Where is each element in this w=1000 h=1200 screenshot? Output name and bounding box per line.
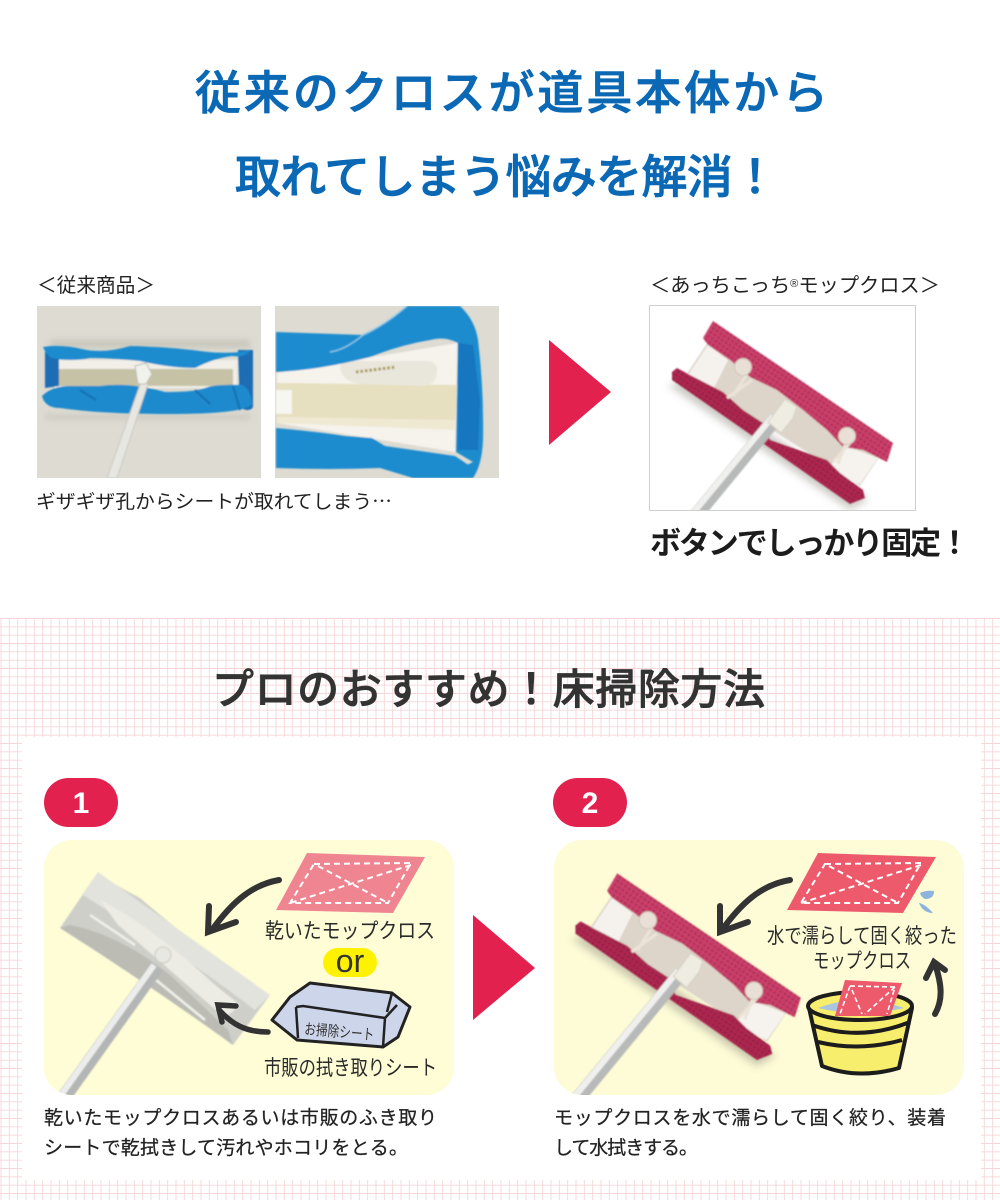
background grid [0,618,1000,1200]
text: step 2: して水拭きする。 [554,1137,698,1159]
label: wrung cloth: 水で濡らして固く絞った [767,925,957,948]
label: new product: モップクロス＞ [798,274,940,297]
badge: 1: 1 [73,787,89,820]
badge: 2 [553,778,627,827]
text: step 1 [44,1107,437,1159]
illustration: bucket [808,980,912,1074]
arrow: to mop from cloth [720,880,790,932]
step 1 [44,778,454,1159]
cloth: wet pink [787,853,936,913]
heading text: プロのおすすめ！床掃除方法 [212,666,765,713]
step 2 [553,778,964,1156]
label: new product: ＜あっちこっち [650,275,789,297]
text: step 2 [554,1107,946,1159]
label: wrung cloth: モップクロス [813,950,911,973]
arrow: to mop from package [218,1005,268,1032]
label: conventional product: ＜従来商品＞ [37,274,155,297]
or pill [323,943,377,979]
label: wrung cloth [767,925,957,973]
photo: mop with sheet [59,872,270,1100]
panel: conventional product [36,274,499,514]
photo: blue cloth close up [275,306,499,478]
text: step 2: モップクロスを水で濡らして固く絞り、装着 [554,1107,946,1129]
caption: new product: ボタンでしっかり固定！ [650,526,970,561]
or pill: or [336,943,365,979]
illustration: wipe package [272,983,410,1047]
arrow: middle triangle [473,915,535,1020]
illustration: wipe package: お掃除シート [304,1020,375,1044]
photo: pink mop [572,872,802,1095]
text: step 1: シートで乾拭きして汚れやホコリをとる。 [44,1137,408,1159]
title [195,67,828,203]
label: new product: ® [790,278,798,290]
arrow: to mop from cloth [208,880,279,932]
title: 取れてしまう悩みを解消！ [235,151,778,203]
panel: method [22,737,981,1180]
label: dry cloth: 乾いたモップクロス [265,920,435,943]
illustration panel 2 [554,840,964,1095]
badge: 1 [44,778,118,827]
photo: blue cloth mop front [37,306,261,478]
water drops [919,891,934,913]
arrow: top triangle [549,340,611,445]
caption: conventional: ギザギザ孔からシートが取れてしまう … [36,487,392,514]
title: 従来のクロスが道具本体から [195,67,828,119]
cloth: dry pink [276,853,425,913]
badge: 2: 2 [582,787,598,820]
illustration panel 1 [44,840,454,1100]
text: step 1: 乾いたモップクロスあるいは市販のふき取り [44,1107,437,1129]
label: commercial sheet: 市販の拭き取りシート [264,1057,437,1080]
arrow: up from bucket [926,962,945,1014]
panel: new product [649,275,958,557]
photo: pink mop [649,305,916,511]
